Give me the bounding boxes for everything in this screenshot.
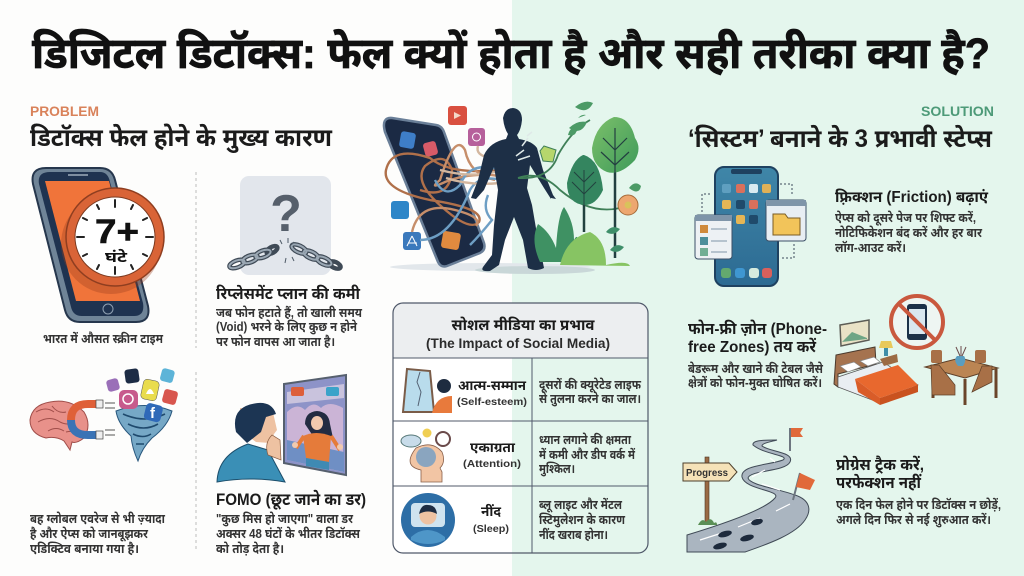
table heading: (The Impact of Social Media) xyxy=(426,336,610,351)
text: progress: अगले दिन फिर से नई शुरुआत करें। xyxy=(836,512,991,529)
icon: question and broken chain xyxy=(228,176,342,275)
icon: fomo person and mirror xyxy=(217,375,346,482)
caption: screen time: भारत में औसत स्क्रीन टाइम xyxy=(43,331,164,346)
icon: no phone, bed and table xyxy=(834,296,998,405)
row: self-esteem xyxy=(403,369,642,413)
text: global average: एडिक्टिव बनाया गया है। xyxy=(30,541,139,556)
solution label: SOLUTION xyxy=(921,104,994,119)
text: friction: फ़्रिक्शन (Friction) बढ़ाएं xyxy=(835,188,989,206)
title: डिजिटल डिटॉक्स: फेल क्यों होता है और सही तरीका क्या है? xyxy=(32,29,990,78)
app icons around phone xyxy=(391,106,485,250)
text: fomo: को तोड़ देता है। xyxy=(216,541,284,556)
row: sleep: ब्लू लाइट और मेंटल xyxy=(539,497,623,513)
silhouette xyxy=(471,108,556,271)
panel: problem xyxy=(30,104,366,556)
table heading: सोशल मीडिया का प्रभाव xyxy=(452,317,595,334)
text: friction: ऐप्स को दूसरे पेज पर शिफ्ट करें, xyxy=(835,210,976,226)
icon: brain magnet and app tornado xyxy=(30,368,179,461)
text: global average: है और ऐप्स को जानबूझकर xyxy=(30,526,148,542)
table heading xyxy=(426,317,610,351)
icon: phone with clock xyxy=(33,168,164,322)
text: phone-free zones: क्षेत्रों को फोन-मुक्त घोषित करें। xyxy=(688,375,822,392)
text: progress: प्रोग्रेस ट्रैक करें, xyxy=(836,455,924,474)
central illustration: phone to nature xyxy=(384,102,641,274)
text: replacement plan xyxy=(216,284,363,349)
text: fomo: FOMO (छूट जाने का डर) xyxy=(216,490,366,510)
tangled wires xyxy=(386,145,508,245)
row: sleep: नींद खराब होना। xyxy=(539,527,608,542)
icon: progress road xyxy=(683,428,815,552)
text: fomo: अक्सर 48 घंटों के भीतर डिटॉक्स xyxy=(216,526,361,541)
text: friction xyxy=(835,188,989,255)
text: progress: परफेक्शन नहीं xyxy=(836,473,922,492)
problem heading: डिटॉक्स फेल होने के मुख्य कारण xyxy=(30,123,333,153)
text: fomo xyxy=(216,490,366,556)
text: replacement plan: रिप्लेसमेंट प्लान की कमी xyxy=(216,284,360,303)
text: replacement plan: पर फोन वापस आ जाता है। xyxy=(216,334,335,349)
row: sleep xyxy=(401,493,626,547)
row: self-esteem: से तुलना करने का जाल। xyxy=(539,391,641,408)
text: global average: बह ग्लोबल एवरेज से भी ज़्यादा xyxy=(30,511,165,526)
text: fomo: "कुछ मिस हो जाएगा" वाला डर xyxy=(216,511,353,528)
row: self-esteem: (Self-esteem) xyxy=(457,396,527,408)
row: sleep: नींद xyxy=(481,503,501,519)
text: progress xyxy=(836,455,1001,529)
text: progress: एक दिन फेल होने पर डिटॉक्स न छोड़ें, xyxy=(836,497,1001,512)
text: friction: लॉग-आउट करें। xyxy=(835,240,906,255)
icon: phone with folders xyxy=(695,167,806,286)
text: phone-free zones: बेडरूम और खाने की टेबल जैसे xyxy=(688,361,824,376)
icon: progress road: Progress xyxy=(686,467,728,479)
text: phone-free zones xyxy=(688,319,827,392)
text: phone-free zones: फोन-फ्री ज़ोन (Phone- xyxy=(688,319,827,338)
clock unit: घंटे xyxy=(105,248,127,266)
text: replacement plan: जब फोन हटाते हैं, तो खाली समय xyxy=(216,305,363,320)
table: impact of social media xyxy=(393,303,648,553)
row: self-esteem: आत्म-सम्मान xyxy=(458,378,527,393)
row: attention: मुश्किल। xyxy=(539,461,575,478)
solution heading: ‘सिस्टम’ बनाने के 3 प्रभावी स्टेप्स xyxy=(688,124,993,153)
icon: brain magnet and app tornado: f xyxy=(150,405,156,422)
row: sleep: (Sleep) xyxy=(473,523,509,535)
phone xyxy=(384,118,484,266)
row: attention: (Attention) xyxy=(463,458,521,470)
row: sleep: स्टिमुलेशन के कारण xyxy=(539,512,626,529)
text: replacement plan: (Void) भरने के लिए कुछ न होने xyxy=(216,319,357,336)
row: attention: ध्यान लगाने की क्षमता xyxy=(539,432,631,447)
row: attention: में कमी और डीप वर्क में xyxy=(539,447,636,462)
signpost xyxy=(683,463,737,481)
row: attention: एकाग्रता xyxy=(470,440,516,455)
text: friction: नोटिफिकेशन बंद करें और हर बार xyxy=(835,225,982,240)
divider top xyxy=(195,172,197,348)
icon: question and broken chain: ? xyxy=(270,185,302,243)
text: phone-free zones: free Zones) तय करें xyxy=(688,337,817,356)
row: self-esteem: दूसरों की क्यूरेटेड लाइफ xyxy=(539,377,642,393)
text: global average xyxy=(30,511,165,556)
plug and vines xyxy=(518,120,620,210)
panel: solution xyxy=(683,104,1001,552)
divider bottom xyxy=(195,372,197,552)
problem label: PROBLEM xyxy=(30,104,99,119)
row: attention xyxy=(401,428,636,482)
clock value: 7+ xyxy=(95,213,139,251)
trees and leaves xyxy=(534,102,641,266)
